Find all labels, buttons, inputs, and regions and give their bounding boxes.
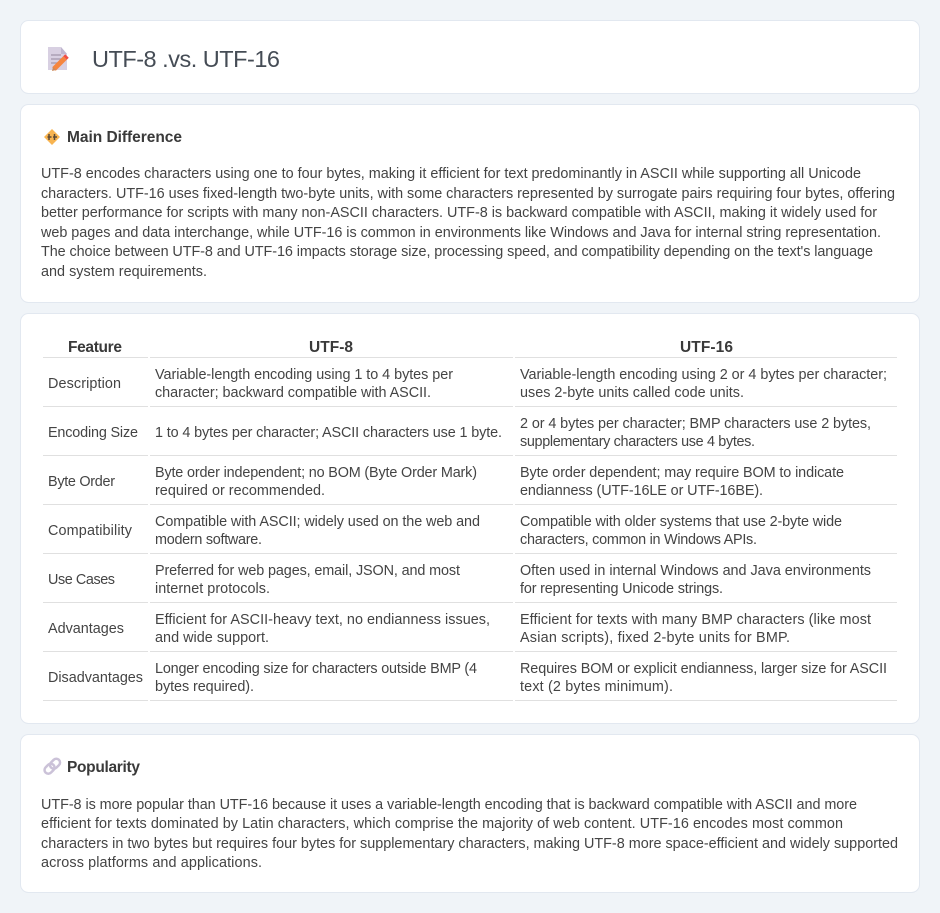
table header	[68, 339, 733, 356]
row: description: Variable-length encoding using 1 to 4 bytes per	[155, 367, 453, 383]
text block: popularity paragraph: UTF-8 is more popular than UTF-16 because it uses a variable-length encoding that is backward compatible with ASCII and more	[41, 797, 857, 813]
row: disadvantages: Requires BOM or explicit endianness, larger size for ASCII	[520, 661, 887, 677]
row: compatibility: modern software.	[155, 532, 262, 548]
row: description	[48, 367, 887, 401]
row: encoding size	[48, 416, 871, 450]
row: description: uses 2-byte units called code units.	[520, 385, 744, 401]
table header: UTF-8	[309, 339, 353, 356]
row: use cases: Preferred for web pages, email, JSON, and most	[155, 563, 460, 579]
row: byte order: Byte Order	[48, 474, 115, 490]
row: disadvantages: Longer encoding size for characters outside BMP (4	[155, 661, 477, 677]
row: description: Description	[48, 376, 121, 392]
row: compatibility: Compatibility	[48, 523, 133, 539]
row: description: character; backward compatible with ASCII.	[155, 385, 431, 401]
text block: main difference paragraph: characters. UTF-16 uses fixed-length two-byte units, with some characters represented by surrogate pairs requiring four bytes, offering	[41, 186, 895, 202]
row: compatibility: Compatible with ASCII; widely used on the web and	[155, 514, 480, 530]
row: advantages: Asian scripts), fixed 2-byte units for BMP.	[520, 630, 790, 646]
panel: main difference	[20, 104, 920, 302]
row: description: Variable-length encoding using 2 or 4 bytes per character;	[520, 367, 887, 383]
text block: main difference paragraph	[40, 166, 895, 280]
title: UTF-8 .vs. UTF-16	[92, 46, 280, 72]
row: advantages: Efficient for texts with many BMP characters (like most	[520, 612, 871, 628]
row: use cases: Use Cases	[48, 572, 115, 588]
text block: popularity paragraph	[41, 797, 898, 871]
heading: popularity: Popularity	[67, 759, 140, 776]
row: disadvantages: text (2 bytes minimum).	[520, 679, 673, 695]
row: byte order	[48, 465, 844, 499]
row: encoding size: 1 to 4 bytes per character; ASCII characters use 1 byte.	[155, 425, 502, 441]
row: byte order: endianness (UTF-16LE or UTF-16BE).	[520, 483, 763, 499]
panel: popularity	[20, 734, 920, 892]
text block: main difference paragraph: and system requirements.	[41, 264, 207, 280]
heading: main difference: Main Difference	[67, 129, 182, 146]
icon: chain link	[43, 757, 62, 775]
text block: popularity paragraph: efficient for texts dominated by Latin characters, which comprise the majority of web content. UTF-16 encodes most common	[41, 816, 843, 832]
text block: main difference paragraph: better performance for scripts with many non-ASCII characters. UTF-8 is backward compatible with ASCII, making it widely used for	[41, 205, 877, 221]
row: disadvantages: Disadvantages	[48, 670, 143, 686]
row: encoding size: supplementary characters use 4 bytes.	[520, 434, 755, 450]
row: compatibility: Compatible with older systems that use 2-byte wide	[520, 514, 842, 530]
row: compatibility	[48, 514, 842, 548]
row: byte order: Byte order dependent; may require BOM to indicate	[520, 465, 844, 481]
table header: UTF-16	[680, 339, 733, 356]
icon: orange diamond	[44, 129, 60, 145]
row: encoding size: Encoding Size	[48, 425, 138, 441]
row: byte order: Byte order independent; no BOM (Byte Order Mark)	[155, 465, 477, 481]
row: use cases: for representing Unicode strings.	[520, 581, 723, 597]
row: encoding size: 2 or 4 bytes per character; BMP characters use 2 bytes,	[520, 416, 871, 432]
text block: main difference paragraph: The choice between UTF-8 and UTF-16 impacts storage size, processing speed, and compatibility depending on the text's language	[41, 244, 873, 260]
panel: title card	[20, 20, 920, 94]
text block: main difference paragraph: UTF-8 encodes characters using one to four bytes, making it efficient for text predominantly in ASCII while supporting all Unicode	[41, 166, 861, 182]
row: disadvantages: bytes required).	[155, 679, 254, 695]
row: advantages: and wide support.	[155, 630, 269, 646]
text block: main difference paragraph: web pages and data interchange, while UTF-16 is common in environments like Windows and Java for internal string representation.	[40, 225, 881, 241]
row: advantages: Efficient for ASCII-heavy text, no endianness issues,	[155, 612, 490, 628]
row: compatibility: characters, common in Windows APIs.	[520, 532, 757, 548]
row: use cases	[48, 563, 871, 597]
row: use cases: internet protocols.	[155, 581, 270, 597]
panel: comparison table	[20, 314, 920, 724]
text block: popularity paragraph: across platforms and applications.	[41, 855, 262, 871]
row: advantages	[48, 612, 871, 646]
icon: document with pencil	[48, 47, 67, 71]
row: byte order: required or recommended.	[155, 483, 325, 499]
row: use cases: Often used in internal Windows and Java environments	[520, 563, 871, 579]
row: disadvantages	[48, 661, 887, 695]
text block: popularity paragraph: characters in two bytes but requires four bytes for supplementary characters, making UTF-8 more space-efficient and widely supported	[41, 836, 898, 852]
row: advantages: Advantages	[48, 621, 124, 637]
table header: Feature	[68, 339, 122, 356]
